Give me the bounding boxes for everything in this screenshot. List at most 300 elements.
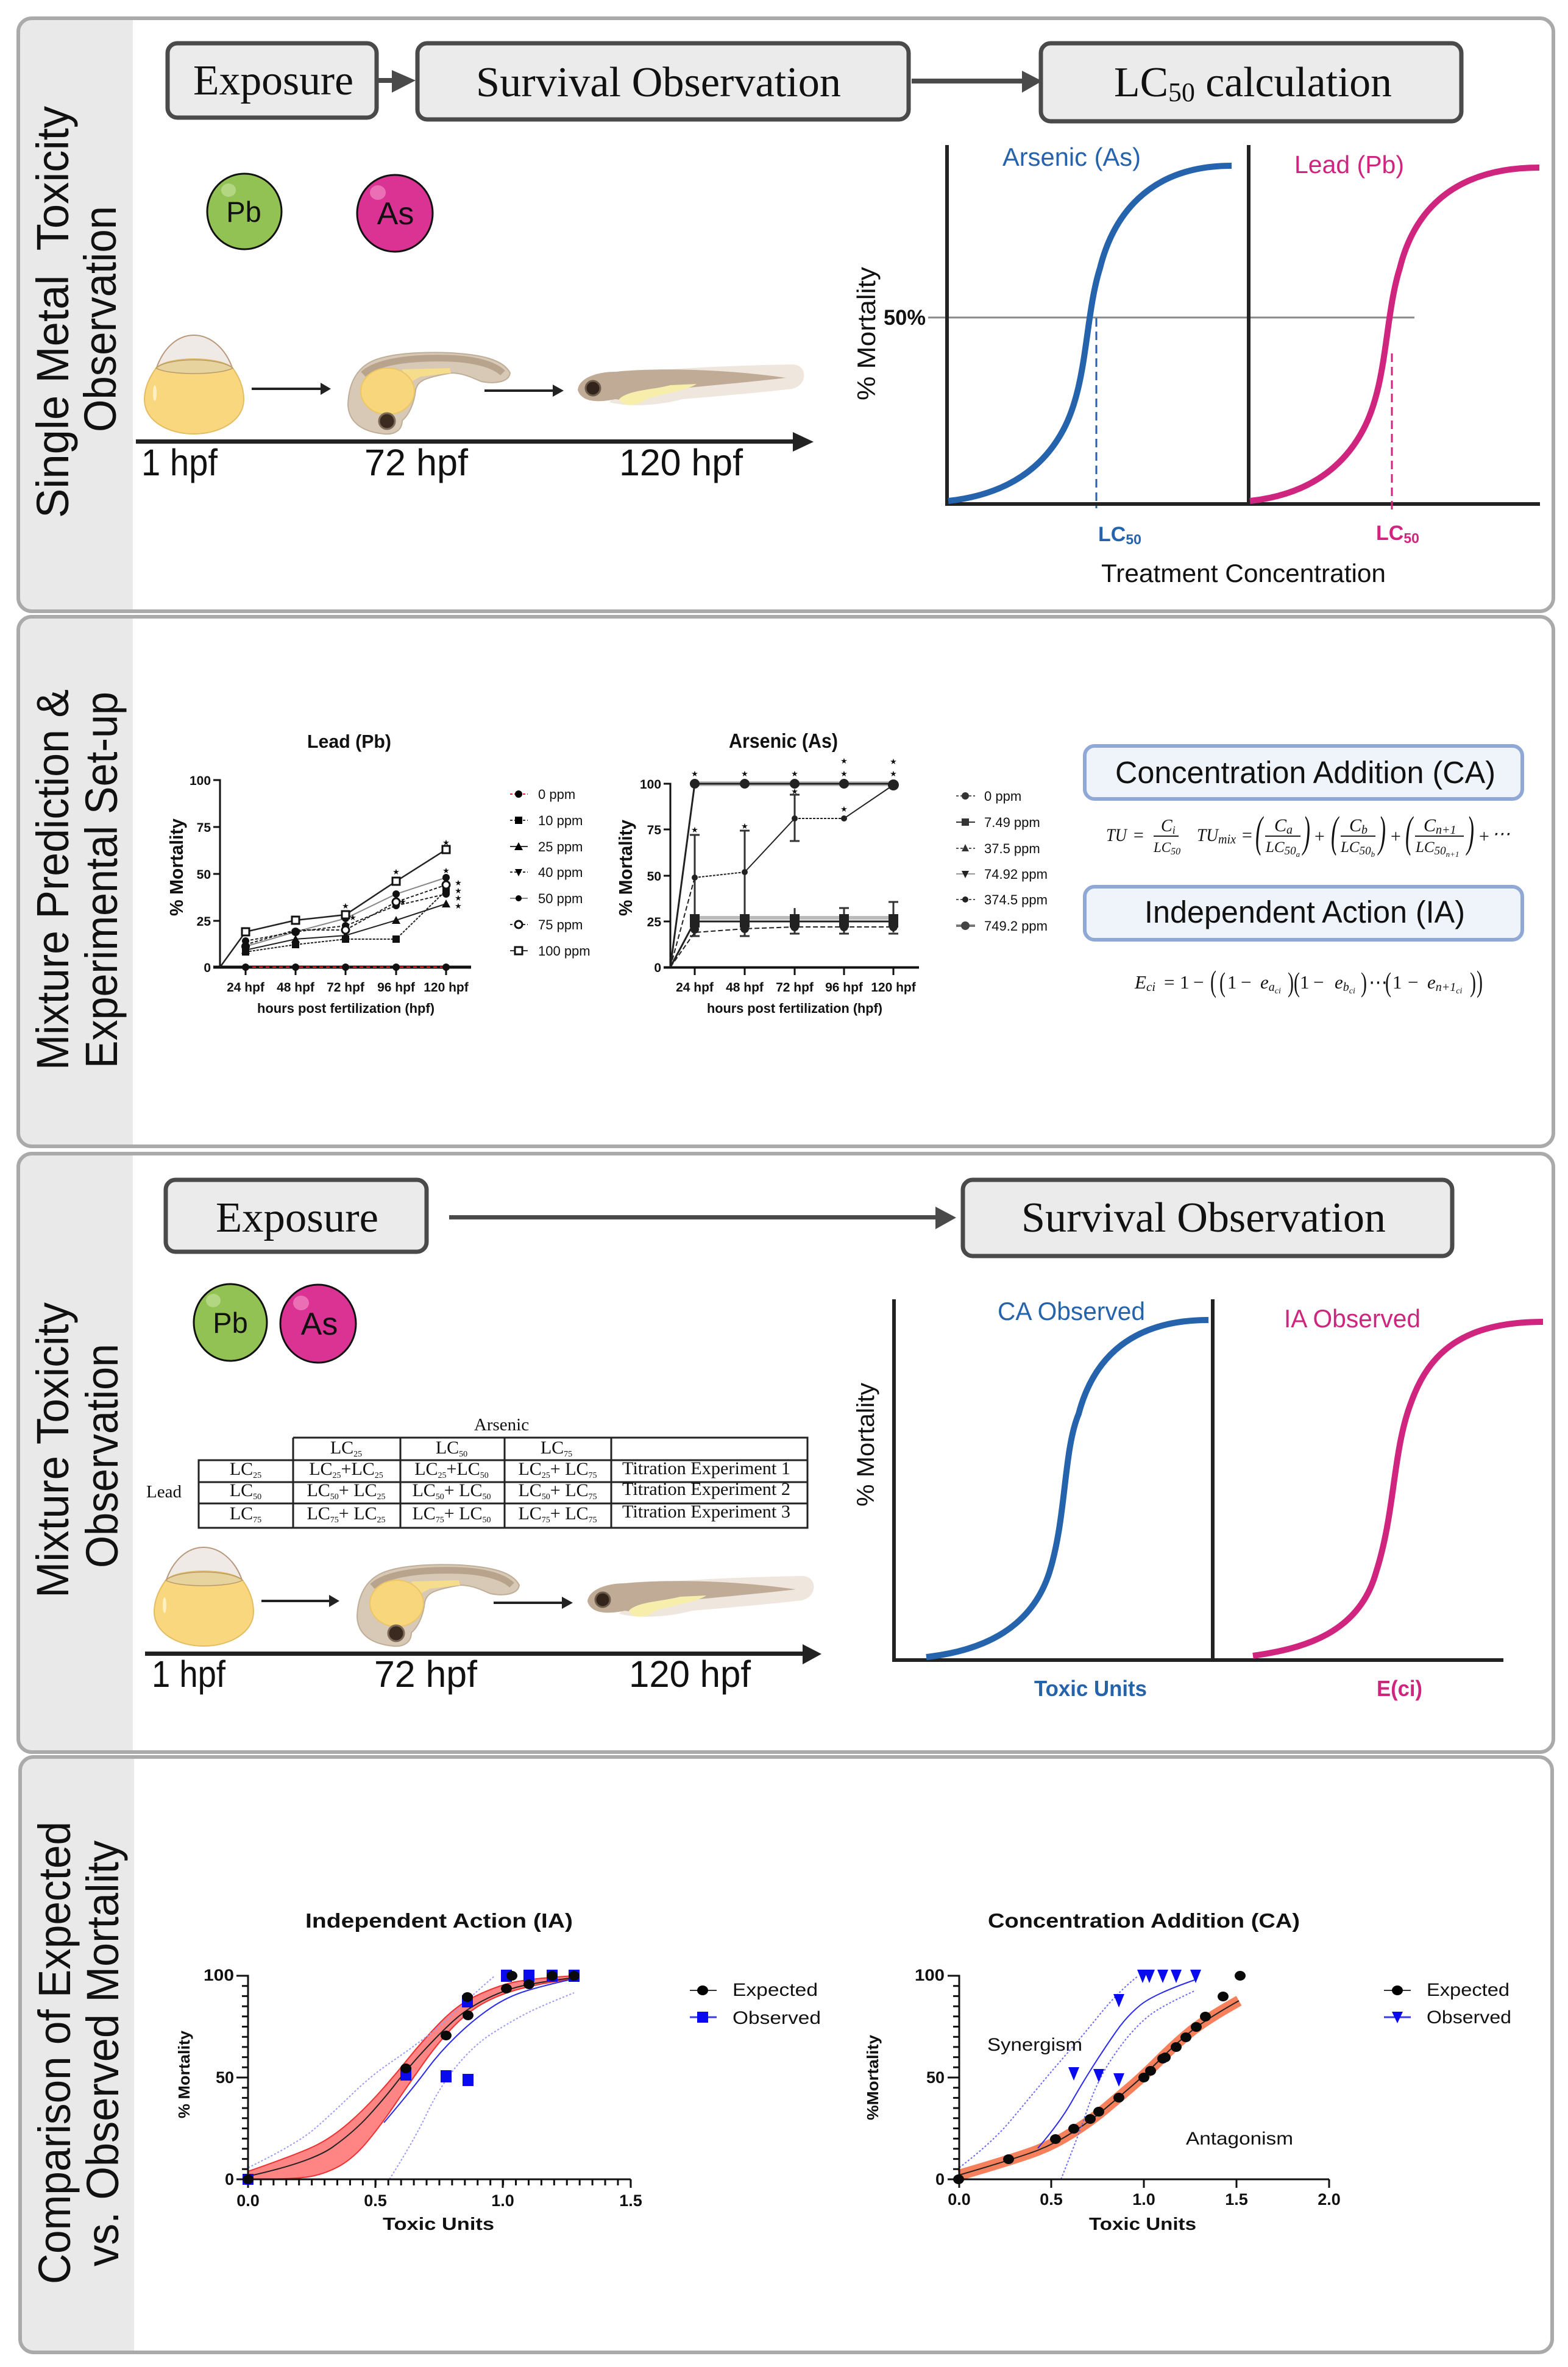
- legend: [690, 1980, 821, 2028]
- legend: arsenic doses: 749.2 ppm: [984, 918, 1048, 934]
- heading: vs observed mortality: vs. Observed Mortality: [77, 1840, 128, 2266]
- chart: LC50 dose-response curves: Lead (Pb): [1294, 151, 1404, 179]
- table: titration design: LC: [230, 1480, 253, 1500]
- table: titration design: 50: [542, 1492, 550, 1502]
- arrow: embryo to larva: [494, 1597, 573, 1609]
- legend: arsenic doses: 0 ppm: [984, 789, 1021, 804]
- formula: toxic units: +: [1389, 826, 1402, 846]
- formula: effect of mixture: (: [1210, 964, 1216, 998]
- step box: exposure: Exposure: [193, 57, 353, 104]
- arrow: egg to embryo: [252, 383, 331, 395]
- table: titration design: LC: [518, 1480, 542, 1500]
- table: titration design: LC: [330, 1438, 353, 1458]
- chart: lead mortality over time: 0: [204, 961, 211, 975]
- table: titration design: LC: [230, 1503, 253, 1524]
- formula: toxic units: n+1: [1446, 850, 1459, 859]
- expected points: [243, 1971, 580, 2184]
- formula: toxic units: C: [1274, 815, 1286, 836]
- series markers: [690, 779, 899, 934]
- step box: survival observation: [963, 1180, 1452, 1256]
- table: titration design: + LC: [550, 1459, 589, 1479]
- chart: arsenic mortality over time: 0: [654, 961, 661, 975]
- panel: single metal toxicity observation: [18, 18, 1553, 611]
- formula: toxic units: C: [1161, 817, 1172, 836]
- chart: arsenic mortality over time: ★: [741, 769, 748, 778]
- legend: arsenic doses: 37.5 ppm: [984, 841, 1040, 856]
- table: titration design: 75: [330, 1516, 339, 1525]
- chart: arsenic mortality over time: 48 hpf: [726, 981, 764, 995]
- formula: toxic units: LC: [1341, 839, 1360, 856]
- formula: toxic units: b: [1361, 823, 1368, 837]
- chart: arsenic mortality over time: ★: [890, 769, 897, 778]
- chart: concentration addition: 50: [926, 2068, 945, 2087]
- table: titration design: LC: [436, 1438, 459, 1458]
- chart: lead mortality over time: 120 hpf: [424, 981, 469, 995]
- chart: arsenic mortality over time: ★: [791, 769, 798, 778]
- formula: toxic units: 50: [1360, 845, 1371, 857]
- timeline: 1 hpf: [152, 1653, 226, 1695]
- table: titration design: 50: [253, 1492, 261, 1502]
- panel: mixture prediction and experimental set-up: [18, 617, 1553, 1146]
- chart: observed mixture curves: E(ci): [1377, 1676, 1422, 1701]
- step box: LC50 calculation: [1041, 43, 1461, 121]
- chart: arsenic mortality over time: ★: [840, 769, 848, 778]
- formula: effect of mixture: b: [1343, 981, 1349, 994]
- formula: effect of mixture: 1: [1227, 971, 1237, 993]
- table: titration design: + LC: [550, 1480, 589, 1500]
- chart: independent action: 0.0: [236, 2191, 260, 2210]
- formula: effect of mixture: (: [1219, 967, 1226, 998]
- formula: toxic units: LC: [1154, 840, 1171, 855]
- timeline: [136, 432, 814, 483]
- chart: concentration addition: 2.0: [1318, 2190, 1341, 2209]
- formula: toxic units: n+1: [1436, 823, 1456, 837]
- step box: survival observation: [417, 43, 909, 119]
- icon: lead ball: Pb: [213, 1307, 248, 1339]
- icon: arsenic ball: [357, 175, 433, 252]
- annotation: synergism: Synergism: [987, 2035, 1082, 2055]
- chart: lead mortality over time: ★: [442, 866, 450, 875]
- table: titration design: + LC: [550, 1503, 589, 1524]
- heading: experimental set-up: Experimental Set-up: [76, 692, 127, 1068]
- icon: arsenic ball: As: [301, 1307, 338, 1342]
- table: titration design: Arsenic: [474, 1415, 529, 1435]
- chart: observed mixture curves: Toxic Units: [1034, 1676, 1147, 1701]
- chart: independent action: 1.0: [491, 2191, 514, 2210]
- table: titration design: LC: [518, 1459, 542, 1479]
- formula: effect of mixture: ): [1288, 967, 1294, 998]
- table: titration design: LC: [518, 1503, 542, 1524]
- formula: effect of mixture: n+1: [1436, 981, 1456, 994]
- formula: effect of mixture: ci: [1456, 987, 1462, 996]
- table: titration design: 50: [459, 1450, 467, 1459]
- curve: CA observed: [926, 1320, 1208, 1657]
- chart: independent action: 0: [225, 2170, 234, 2188]
- formula: effect of mixture: ci: [1275, 987, 1281, 996]
- callout: independent action: [1085, 887, 1522, 940]
- table: titration design: 75: [542, 1516, 550, 1525]
- chart: concentration addition: Toxic Units: [1089, 2215, 1196, 2234]
- chart: LC50 dose-response curves: Arsenic (As): [1002, 143, 1141, 171]
- icon: zebrafish egg: [144, 335, 244, 434]
- arrow: exposure to survival: [377, 70, 416, 93]
- chart: lead mortality over time: 50: [197, 868, 211, 882]
- formula: effect of mixture: e: [1335, 971, 1343, 993]
- table: titration design: 75: [589, 1516, 597, 1525]
- chart: concentration addition: 100: [915, 1966, 945, 1984]
- formula: toxic units: LC: [1416, 839, 1435, 856]
- chart: arsenic mortality over time: ★: [840, 756, 848, 765]
- chart: arsenic mortality over time: 100: [640, 778, 661, 792]
- chart: lead mortality over time: 96 hpf: [377, 981, 416, 995]
- formula: toxic units: +: [1478, 826, 1490, 846]
- chart: arsenic mortality over time: 120 hpf: [871, 981, 917, 995]
- formula: effect of mixture: −: [1408, 971, 1418, 993]
- table: titration design: Titration Experiment 2: [622, 1479, 790, 1499]
- curve: IA observed: [1253, 1322, 1543, 1656]
- chart: arsenic mortality over time: ★: [840, 804, 848, 814]
- table: titration design: 25: [333, 1471, 341, 1480]
- icon: zebrafish egg: [154, 1547, 254, 1646]
- formula: toxic units: C: [1424, 815, 1436, 836]
- legend: lead doses: 10 ppm: [538, 813, 583, 828]
- chart: lead mortality over time: [166, 731, 591, 1016]
- table: titration design: 75: [589, 1492, 597, 1502]
- chart: arsenic mortality over time: Arsenic (As): [729, 729, 838, 752]
- step box: LC50 calculation: calculation: [1195, 59, 1392, 106]
- table: titration design: 50: [480, 1471, 489, 1480]
- formula: effect of mixture: ⋯: [1369, 971, 1388, 993]
- series markers: [241, 874, 450, 971]
- table: titration design: LC: [412, 1480, 436, 1500]
- formula: toxic units: ): [1466, 807, 1474, 856]
- annotation: antagonism: Antagonism: [1186, 2129, 1293, 2149]
- formula: effect of mixture: 1: [1392, 971, 1402, 993]
- chart: concentration addition: 0: [935, 2170, 945, 2188]
- chart: observed mixture curves: IA Observed: [1284, 1304, 1421, 1333]
- chart: lead mortality over time: ★: [455, 893, 462, 903]
- legend: lead doses: 75 ppm: [538, 917, 583, 932]
- formula: toxic units: (: [1405, 807, 1414, 856]
- chart: arsenic mortality over time: 24 hpf: [676, 981, 714, 995]
- chart: lead mortality over time: ★: [455, 886, 462, 895]
- formula: effect of mixture: e: [1427, 971, 1436, 993]
- formula: effect of mixture: −: [1193, 971, 1204, 993]
- table: titration design: 25: [353, 1450, 362, 1459]
- formula: toxic units: C: [1349, 815, 1361, 836]
- table: titration design: +LC: [341, 1459, 375, 1479]
- arrow: exposure to survival: [449, 1207, 956, 1229]
- table: titration design: Titration Experiment 1: [622, 1458, 790, 1478]
- formula: effect of mixture: e: [1260, 971, 1269, 993]
- chart: arsenic mortality over time: 96 hpf: [825, 981, 864, 995]
- chart: lead mortality over time: % Mortality: [166, 818, 187, 916]
- timeline: [145, 1644, 821, 1695]
- step box: LC50 calculation: LC: [1114, 59, 1168, 106]
- formula: effect of mixture: [1134, 964, 1483, 998]
- series: dose curves: [670, 784, 893, 967]
- chart: LC50 dose-response curves: Treatment Concentration: [1101, 559, 1386, 587]
- formula: effect of mixture: −: [1241, 971, 1251, 993]
- chart: independent action: 50: [216, 2068, 234, 2087]
- formula: toxic units: ⋯: [1492, 824, 1510, 844]
- timeline: 1 hpf: [141, 442, 218, 483]
- step box: survival observation: Survival Observation: [1021, 1194, 1386, 1241]
- chart: observed mixture curves: % Mortality: [853, 1383, 879, 1506]
- legend: arsenic doses: [956, 789, 1048, 934]
- table: titration design: 75: [564, 1450, 572, 1459]
- chart: concentration addition: Concentration Addition (CA): [988, 1909, 1300, 1932]
- table: titration design: + LC: [444, 1480, 483, 1500]
- table: titration design: LC: [307, 1503, 330, 1524]
- chart: lead mortality over time: ★: [399, 897, 406, 906]
- legend: lead doses: 40 ppm: [538, 865, 583, 880]
- chart: arsenic mortality over time: 50: [647, 870, 661, 884]
- timeline: 120 hpf: [619, 442, 743, 483]
- chart: arsenic mortality over time: ★: [691, 825, 698, 834]
- chart: lead mortality over time: ★: [442, 838, 450, 847]
- icon: zebrafish embryo: [357, 1564, 519, 1646]
- chart: arsenic mortality over time: ★: [691, 769, 698, 778]
- chart: independent action: % Mortality: [175, 2030, 193, 2118]
- chart: LC50 dose-response curves: [852, 143, 1540, 587]
- table: titration design: 25: [377, 1516, 386, 1525]
- timeline: 120 hpf: [629, 1653, 751, 1695]
- chart: lead mortality over time: ★: [342, 901, 349, 910]
- arrow: egg to embryo: [261, 1595, 339, 1607]
- icon: zebrafish embryo: [348, 352, 510, 434]
- legend: Expected: [1427, 1980, 1509, 2000]
- chart: LC50 dose-response curves: 50: [1126, 531, 1141, 547]
- legend: lead doses: 50 ppm: [538, 891, 583, 906]
- step box: exposure: Exposure: [216, 1194, 378, 1241]
- formula: toxic units: ): [1377, 807, 1386, 856]
- chart: lead mortality over time: ★: [392, 867, 400, 876]
- legend: Observed: [733, 2008, 821, 2028]
- observed points: [1068, 1970, 1201, 2087]
- step box: exposure: [166, 1180, 427, 1252]
- confidence band: [248, 1976, 574, 2179]
- heading: observation: Observation: [75, 206, 126, 432]
- chart: arsenic mortality over time: ★: [791, 787, 798, 796]
- formula: effect of mixture: ): [1470, 967, 1476, 998]
- formula: toxic units: +: [1313, 826, 1325, 846]
- chart: concentration addition: 0.0: [948, 2190, 971, 2209]
- chart: observed mixture curves: [853, 1297, 1543, 1701]
- formula: toxic units: 50: [1171, 846, 1180, 857]
- chart: arsenic mortality over time: [615, 729, 1048, 1016]
- axes: [948, 1976, 1329, 2188]
- timeline: 72 hpf: [374, 1653, 478, 1695]
- formula: toxic units: LC: [1266, 839, 1285, 856]
- chart: lead mortality over time: ★: [455, 901, 462, 910]
- icon: lead ball: [207, 174, 282, 249]
- table: titration design: Titration Experiment 3: [622, 1502, 790, 1522]
- table: titration design: 25: [253, 1471, 261, 1480]
- table: titration design: LC: [412, 1503, 436, 1524]
- step box: survival observation: Survival Observation: [476, 59, 841, 106]
- chart: LC50 dose-response curves: 50: [1403, 530, 1419, 546]
- chart: independent action: Toxic Units: [383, 2215, 494, 2234]
- formula: effect of mixture: 1: [1180, 971, 1190, 993]
- chart: concentration addition: 1.0: [1132, 2190, 1155, 2209]
- table: titration design: LC: [541, 1438, 564, 1458]
- icon: lead ball: [194, 1284, 267, 1361]
- formula: effect of mixture: (: [1294, 967, 1300, 998]
- table: titration design: LC: [307, 1480, 330, 1500]
- curve: lead: [1250, 168, 1539, 501]
- heading: observation: Observation: [77, 1344, 127, 1568]
- chart: lead mortality over time: ★: [455, 878, 462, 887]
- icon: zebrafish larva: [578, 364, 804, 405]
- table: titration design: 25: [377, 1492, 386, 1502]
- chart: observed mixture curves: CA Observed: [998, 1297, 1145, 1325]
- chart: LC50 dose-response curves: % Mortality: [852, 267, 881, 400]
- legend: lead doses: 100 ppm: [538, 943, 591, 959]
- formula: effect of mixture: ): [1477, 964, 1483, 998]
- formula: effect of mixture: 1: [1300, 971, 1309, 993]
- error bars: [690, 795, 898, 936]
- table: titration design: 25: [542, 1471, 550, 1480]
- chart: independent action: 1.5: [619, 2191, 642, 2210]
- table: titration design: LC: [309, 1459, 333, 1479]
- chart: LC50 dose-response curves: LC: [1098, 523, 1126, 546]
- chart: lead mortality over time: 25: [197, 915, 211, 929]
- formula: effect of mixture: E: [1135, 971, 1146, 993]
- axes: [236, 1976, 631, 2188]
- callout: concentration addition: [1085, 746, 1522, 799]
- table: titration design: LC: [414, 1459, 438, 1479]
- chart: lead mortality over time: Lead (Pb): [307, 731, 391, 752]
- formula: toxic units: (: [1331, 807, 1339, 856]
- table: titration design: 50: [483, 1492, 491, 1502]
- table: titration design: +LC: [447, 1459, 480, 1479]
- heading: single metal toxicity: Single Metal Toxicity: [27, 106, 78, 518]
- heading: comparison of expected: Comparison of Expected: [29, 1822, 80, 2284]
- step box: exposure: [168, 43, 377, 118]
- formula: toxic units: mix: [1218, 831, 1236, 846]
- callout: concentration addition: Concentration Addition (CA): [1115, 755, 1495, 790]
- arrow: embryo to larva: [484, 385, 564, 397]
- table: titration design: 50: [330, 1492, 339, 1502]
- arrow: survival to LC50: [912, 71, 1042, 93]
- formula: effect of mixture: ci: [1349, 987, 1355, 996]
- curve: arsenic: [948, 166, 1232, 501]
- table: titration design: 75: [589, 1471, 597, 1480]
- chart: arsenic mortality over time: ★: [741, 822, 748, 831]
- icon: lead ball: Pb: [226, 196, 261, 228]
- chart: lead mortality over time: 72 hpf: [327, 981, 365, 995]
- formula: toxic units: 50: [1435, 845, 1446, 857]
- chart: concentration addition: 1.5: [1225, 2190, 1248, 2209]
- formula: toxic units: TU: [1106, 825, 1128, 845]
- chart: independent action: 100: [204, 1966, 234, 1984]
- table: titration design: 25: [438, 1471, 447, 1480]
- table: titration design: + LC: [339, 1503, 377, 1524]
- legend: arsenic doses: 74.92 ppm: [984, 867, 1048, 882]
- formula: toxic units: TU: [1197, 825, 1220, 845]
- table: titration design: 75: [253, 1516, 261, 1525]
- formula: toxic units: ): [1302, 807, 1310, 856]
- legend: Expected: [733, 1980, 818, 2000]
- legend: lead doses: 0 ppm: [538, 787, 575, 802]
- formula: toxic units: =: [1241, 825, 1253, 845]
- callout: independent action: Independent Action (IA): [1144, 895, 1465, 929]
- table: titration design: Lead: [146, 1483, 182, 1502]
- legend: lead doses: 25 ppm: [538, 839, 583, 854]
- step box: LC50 calculation: 50: [1168, 77, 1195, 107]
- formula: toxic units: [1106, 807, 1510, 859]
- series: dose curves: [220, 850, 446, 967]
- table: titration design: [146, 1415, 807, 1528]
- chart: LC50 dose-response curves: 50%: [884, 306, 926, 330]
- heading: mixture toxicity: Mixture Toxicity: [27, 1302, 78, 1598]
- chart: concentration addition: [864, 1909, 1511, 2234]
- chart: lead mortality over time: 24 hpf: [227, 981, 265, 995]
- table: titration design: LC: [230, 1459, 253, 1479]
- confidence band: [959, 2001, 1239, 2175]
- chart: lead mortality over time: hours post fertilization (hpf): [257, 1001, 435, 1016]
- chart: lead mortality over time: ★: [349, 913, 357, 922]
- chart: lead mortality over time: 100: [190, 774, 211, 788]
- table: titration design: 25: [375, 1471, 383, 1480]
- formula: effect of mixture: ): [1361, 967, 1367, 998]
- formula: toxic units: (: [1255, 807, 1264, 856]
- legend: arsenic doses: 7.49 ppm: [984, 815, 1040, 830]
- observed points: [243, 1970, 580, 2185]
- formula: effect of mixture: −: [1313, 971, 1324, 993]
- expected points: [953, 1971, 1246, 2184]
- panel: mixture toxicity observation: [18, 1154, 1553, 1752]
- table: titration design: + LC: [339, 1480, 377, 1500]
- formula: effect of mixture: ci: [1146, 979, 1155, 994]
- icon: arsenic ball: [280, 1285, 356, 1363]
- table: titration design: + LC: [444, 1503, 483, 1524]
- chart: concentration addition: %Mortality: [864, 2034, 882, 2120]
- formula: effect of mixture: (: [1385, 967, 1391, 998]
- table: titration design: 75: [436, 1516, 444, 1525]
- chart: arsenic mortality over time: hours post fertilization (hpf): [707, 1001, 882, 1016]
- heading: mixture prediction: Mixture Prediction &: [27, 689, 78, 1070]
- formula: toxic units: 50: [1285, 845, 1296, 857]
- chart: LC50 dose-response curves: LC: [1376, 522, 1403, 545]
- formula: effect of mixture: a: [1269, 981, 1275, 994]
- legend: Observed: [1427, 2007, 1511, 2028]
- formula: effect of mixture: =: [1163, 971, 1176, 993]
- timeline: 72 hpf: [364, 442, 469, 483]
- formula: toxic units: a: [1286, 823, 1293, 837]
- formula: toxic units: a: [1296, 850, 1300, 859]
- chart: independent action: 0.5: [364, 2191, 387, 2210]
- table: titration design: 50: [483, 1516, 491, 1525]
- icon: arsenic ball: As: [377, 196, 414, 232]
- chart: lead mortality over time: 75: [197, 821, 211, 835]
- icon: zebrafish larva: [587, 1576, 814, 1617]
- chart: arsenic mortality over time: 25: [647, 915, 661, 929]
- table: titration design: 50: [436, 1492, 444, 1502]
- chart: arsenic mortality over time: ★: [890, 757, 897, 766]
- formula: toxic units: b: [1371, 850, 1375, 859]
- legend: lead doses: [510, 787, 591, 959]
- chart: independent action: [175, 1909, 821, 2234]
- chart: independent action: Independent Action (IA): [305, 1909, 573, 1932]
- chart: arsenic mortality over time: 72 hpf: [776, 981, 814, 995]
- chart: arsenic mortality over time: 75: [647, 823, 661, 837]
- chart: concentration addition: 0.5: [1040, 2190, 1063, 2209]
- formula: toxic units: =: [1132, 825, 1144, 845]
- panel: comparison of expected vs observed mortality: [20, 1757, 1552, 2352]
- formula: toxic units: i: [1172, 824, 1176, 836]
